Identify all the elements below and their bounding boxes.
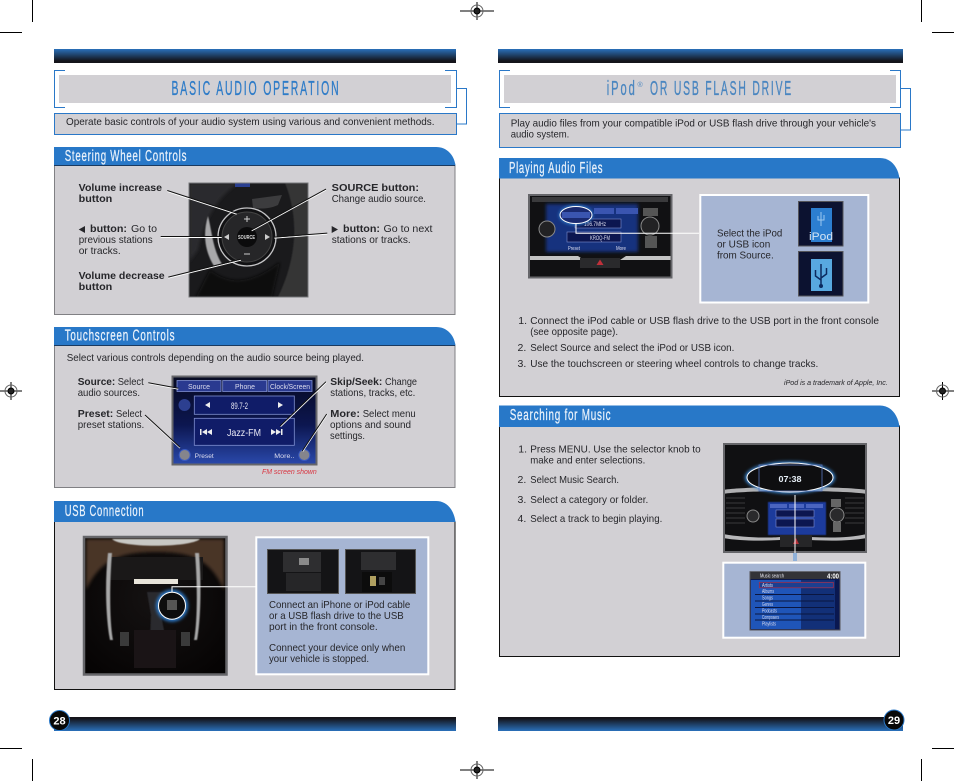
list: connect steps — [518, 315, 879, 370]
callout lines: steering wheel — [161, 189, 327, 278]
panel: usb connection — [54, 501, 456, 690]
label: preset: Preset: — [78, 408, 113, 420]
list: search steps: 3. — [518, 494, 526, 506]
touchscreen display: More.. — [274, 453, 295, 460]
text: usb instructions: Connect your device only when — [269, 642, 405, 654]
label: previous button: or tracks. — [79, 245, 121, 257]
label: more: options and sound — [330, 419, 411, 431]
heading: searching for music: Searching for Music — [510, 407, 611, 424]
right page intro box: audio system. — [511, 129, 569, 141]
text: usb instructions: Connect an iPhone or iPod cable — [269, 599, 410, 611]
label: volume increase button: Volume increase — [79, 182, 162, 194]
panel: searching for music — [499, 406, 900, 656]
label: source: audio sources. — [78, 387, 140, 399]
list: search steps — [518, 444, 701, 525]
page number 28 — [50, 710, 456, 731]
music search screen: Composers — [762, 615, 779, 621]
text: usb instructions: your vehicle is stopped. — [269, 653, 369, 665]
heading: touchscreen controls: Touchscreen Controls — [65, 328, 175, 344]
list: connect steps: Select Source and select the iPod or USB icon. — [530, 342, 734, 354]
text: usb instructions: or a USB flash drive to the USB — [269, 610, 404, 622]
label: more: More: — [330, 408, 360, 420]
callout lines: touchscreen — [145, 382, 327, 451]
page number 28: 28 — [53, 716, 66, 728]
icon: ipod: iPod — [809, 231, 833, 243]
right page title block — [500, 70, 910, 130]
console photo — [83, 536, 227, 675]
label: skip/seek: Change — [385, 376, 417, 388]
list: connect steps: Connect the iPod cable or USB flash drive to the USB port in the front console — [530, 315, 879, 327]
label: next button: stations or tracks. — [332, 234, 411, 246]
panel: steering wheel controls — [54, 147, 456, 314]
label: skip/seek: stations, tracks, etc. — [330, 387, 415, 399]
music search screen: Genres — [762, 602, 773, 608]
connector line: search — [793, 495, 797, 561]
list: connect steps: Use the touchscreen or steering wheel controls to change tracks. — [530, 358, 818, 370]
icon: usb — [798, 252, 843, 296]
head unit photo: 106.7MHz — [584, 222, 606, 228]
label: previous button — [79, 223, 157, 257]
text: usb instructions: port in the front console. — [269, 621, 378, 633]
list: search steps: Press MENU. Use the selector knob to — [530, 444, 701, 456]
text: select icon: Select the iPod — [717, 228, 782, 240]
list: search steps: Select Music Search. — [530, 474, 619, 486]
label: previous button: Go to — [131, 223, 157, 235]
label: next button — [332, 223, 433, 246]
label: preset: preset stations. — [78, 419, 144, 431]
music search screen: Playlists — [762, 622, 776, 628]
heading: usb connection: USB Connection — [65, 503, 144, 520]
left page top bar — [54, 49, 456, 63]
music search screen: 4:00 — [827, 574, 839, 581]
touchscreen display: 89.7-2 — [231, 401, 248, 411]
label: volume increase button — [79, 182, 162, 205]
list: search steps: Select a category or folder. — [530, 494, 648, 506]
list: connect steps: 2. — [518, 342, 526, 354]
music search screen — [750, 572, 840, 630]
touchscreen display: Phone — [235, 384, 255, 391]
touchscreen display — [172, 376, 316, 464]
head unit photo — [528, 194, 672, 278]
list: connect steps: (see opposite page). — [530, 326, 618, 338]
touchscreen display: Source — [188, 384, 210, 391]
music search screen: Podcasts — [762, 608, 777, 614]
label: source button: Change audio source. — [332, 193, 426, 205]
page number 29: 29 — [888, 715, 900, 727]
head unit photo: Preset — [568, 246, 581, 252]
title: ipod or usb flash drive: OR USB FLASH DRIVE — [650, 78, 793, 100]
usb port photo closed — [268, 550, 338, 594]
panel: touchscreen controls — [54, 327, 456, 488]
icon: ipod — [798, 202, 843, 246]
connector line: source — [576, 224, 699, 233]
title: ipod or usb flash drive: iPod — [607, 78, 637, 100]
left page intro box: Operate basic controls of your audio system using various and convenient methods. — [66, 116, 434, 128]
text: select icon — [717, 228, 782, 262]
touchscreen display: Clock/Screen — [270, 384, 310, 391]
title: ipod or usb flash drive: ® — [638, 81, 644, 89]
callout box: music search screen — [723, 563, 865, 638]
music search screen: Artists — [762, 583, 773, 589]
music search screen: Albums — [762, 589, 774, 595]
title: basic audio operation: BASIC AUDIO OPERATION — [172, 78, 340, 100]
dashboard photo — [723, 443, 867, 553]
label: source — [78, 376, 144, 399]
label: volume increase button: button — [79, 193, 112, 205]
label: volume decrease button: Volume decrease — [79, 270, 165, 282]
list: search steps: Select a track to begin playing. — [530, 513, 662, 525]
callout box: ipod or usb icon — [700, 195, 868, 302]
label: previous button: button: — [90, 223, 127, 235]
list: search steps: 4. — [518, 513, 526, 525]
music search screen: Songs — [762, 596, 773, 602]
list: connect steps: 1. — [518, 315, 527, 327]
label: next button: button: — [343, 223, 380, 235]
title: ipod or usb flash drive — [607, 78, 793, 100]
label: more: settings. — [330, 430, 365, 442]
left page title block — [54, 70, 466, 124]
right page intro box — [500, 114, 900, 148]
head unit photo: More — [616, 246, 626, 252]
text: select icon: or USB icon — [717, 239, 770, 251]
usb port photo open — [346, 550, 416, 594]
label: skip/seek: Skip/Seek: — [330, 376, 382, 388]
page number 29 — [498, 710, 904, 731]
note: trademark: iPod is a trademark of Apple, Inc. — [784, 378, 888, 387]
label: volume decrease button: button — [79, 281, 112, 293]
dashboard photo: 07:38 — [778, 475, 802, 484]
label: preset — [78, 408, 144, 431]
label: source: Select — [118, 376, 144, 388]
label: source button — [332, 182, 426, 205]
touchscreen display: Preset — [195, 453, 214, 460]
steering wheel photo — [189, 183, 308, 297]
head unit photo: KROQ-FM — [590, 236, 610, 242]
panel: playing audio files — [499, 158, 900, 396]
label: skip/seek — [330, 376, 417, 399]
heading: steering wheel controls: Steering Wheel Controls — [65, 148, 187, 165]
list: search steps: 2. — [518, 474, 526, 486]
music search screen: Music search — [760, 574, 784, 580]
right page intro box: Play audio files from your compatible iPod or USB flash drive through your vehicle's — [511, 118, 876, 130]
label: previous button: previous stations — [79, 234, 153, 246]
intro text: touchscreen: Select various controls depending on the audio source being played. — [67, 352, 364, 364]
label: preset: Select — [116, 408, 142, 420]
text: usb instructions — [269, 599, 410, 665]
label: source button: SOURCE button: — [332, 182, 419, 194]
list: connect steps: 3. — [518, 358, 526, 370]
callout box: usb port — [256, 537, 428, 674]
text: select icon: from Source. — [717, 250, 774, 262]
connector line: usb — [172, 587, 256, 592]
steering wheel photo: SOURCE — [238, 235, 256, 241]
right page top bar — [498, 49, 903, 63]
touchscreen display: Jazz-FM — [227, 428, 261, 439]
label: source: Source: — [78, 376, 115, 388]
left page intro box — [54, 114, 456, 134]
label: volume decrease button — [79, 270, 165, 293]
list: search steps: make and enter selections. — [530, 454, 645, 466]
label: next button: Go to next — [384, 223, 433, 235]
label: more — [330, 408, 416, 442]
label: more: Select menu — [363, 408, 416, 420]
heading: playing audio files: Playing Audio Files — [509, 160, 603, 177]
list: search steps: 1. — [518, 444, 527, 456]
note: fm screen shown: FM screen shown — [262, 467, 317, 476]
